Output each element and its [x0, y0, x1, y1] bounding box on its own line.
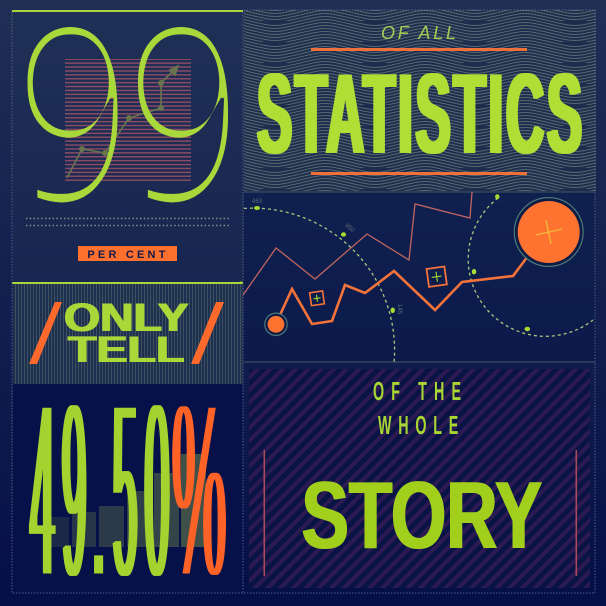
panel: line chart — [239, 192, 596, 363]
panel: 99 per cent — [12, 10, 243, 284]
data labels: 145 — [396, 304, 402, 315]
panel: of all statistics — [244, 10, 596, 191]
text: of the: OF THE — [373, 378, 461, 406]
text: whole: WHOLE — [378, 412, 458, 440]
striped chart backdrop — [65, 59, 191, 181]
thin pink line — [243, 192, 472, 295]
per cent badge: PER CENT — [87, 249, 169, 261]
data labels: 850 — [344, 223, 356, 234]
thick orange line — [280, 256, 528, 324]
slash left — [29, 302, 62, 364]
only tell words: ONLY — [64, 296, 189, 340]
small orange node — [265, 313, 287, 335]
big number 99 — [28, 26, 228, 202]
slash right — [191, 302, 224, 364]
bar chart — [51, 454, 206, 547]
only tell words — [64, 296, 189, 370]
heading: statistics: STATISTICS — [257, 50, 585, 177]
dashed arcs — [244, 198, 593, 363]
panel: of the whole story — [249, 369, 590, 588]
marker square small — [310, 291, 324, 306]
line chart with arrow — [67, 66, 178, 178]
large orange node — [514, 198, 583, 266]
per cent badge — [78, 246, 177, 261]
text: of all: OF ALL — [381, 23, 459, 43]
data labels: 463 — [252, 199, 263, 205]
panel: 49.50 per cent — [13, 348, 243, 606]
dotted rules — [26, 218, 229, 226]
rule right — [576, 450, 577, 576]
rule left — [264, 450, 265, 576]
data labels — [252, 199, 402, 315]
only tell words: TELL — [68, 329, 185, 370]
marker square large — [427, 267, 447, 287]
heading: story: STORY — [302, 462, 542, 568]
panel: only tell — [13, 284, 243, 384]
lime data points — [239, 194, 530, 331]
